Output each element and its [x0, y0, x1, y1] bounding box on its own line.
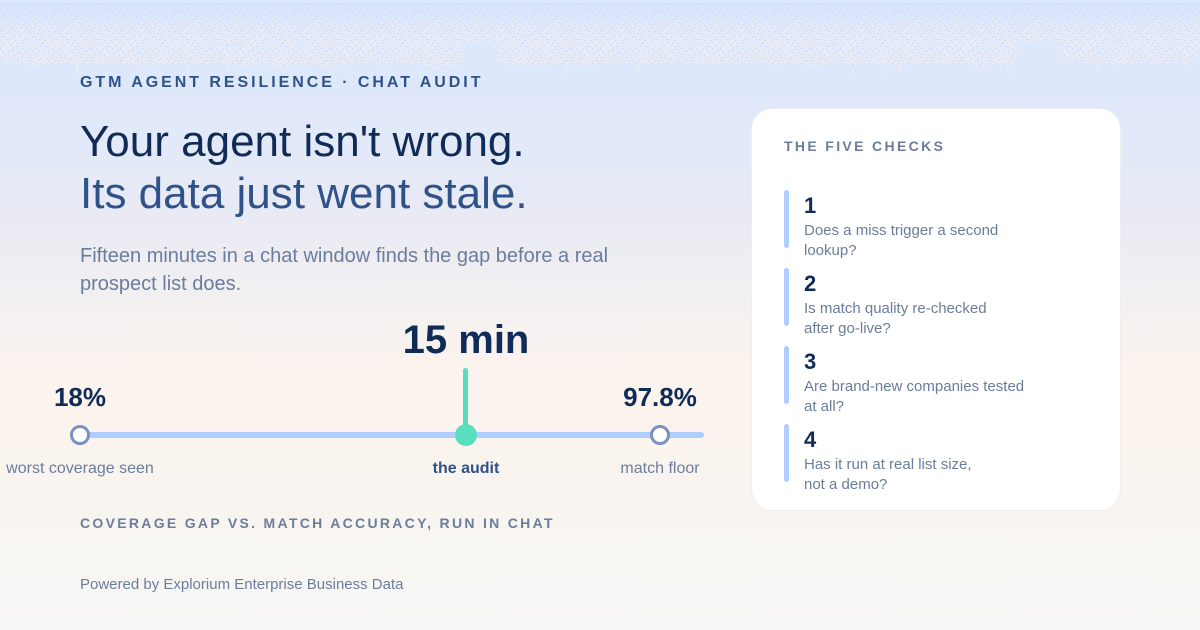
- label: match floor: match floor: [620, 460, 700, 477]
- check 3 text: Are brand-new companies tested: [804, 378, 1024, 395]
- eyebrow heading: GTM AGENT RESILIENCE · CHAT AUDIT: [80, 74, 483, 91]
- value: 97.8%: 97.8%: [623, 382, 697, 412]
- check 1: [784, 190, 998, 259]
- check 3 text: at all?: [804, 398, 844, 415]
- panel heading: THE FIVE CHECKS: [784, 138, 945, 154]
- check 3 number: 3: [804, 349, 816, 374]
- check 4 bar: [784, 424, 789, 482]
- value: 18%: 18%: [54, 382, 106, 412]
- chart caption: COVERAGE GAP VS. MATCH ACCURACY, RUN IN CHAT: [80, 515, 555, 531]
- check 1 text: [804, 222, 998, 259]
- check 2 number: 2: [804, 271, 816, 296]
- check 1 text: lookup?: [804, 242, 857, 259]
- check 1 number: 1: [804, 193, 816, 218]
- check 4 number: 4: [804, 427, 816, 452]
- check 4 text: Has it run at real list size,: [804, 456, 972, 473]
- check 3 bar: [784, 346, 789, 404]
- check 3 text: [804, 378, 1024, 415]
- panel: the five checks: [752, 109, 1120, 510]
- label: the audit: the audit: [433, 460, 499, 477]
- timeline chart: [6, 318, 704, 477]
- subtitle: Fifteen minutes in a chat window finds the gap before a real: [80, 245, 608, 267]
- footer: Powered by Explorium Enterprise Business Data: [80, 576, 403, 593]
- check 4 text: not a demo?: [804, 476, 887, 493]
- check 1 text: Does a miss trigger a second: [804, 222, 998, 239]
- title: [80, 117, 528, 218]
- value: 15 min: 15 min: [403, 318, 529, 362]
- audit marker dot: [455, 424, 477, 446]
- check 2: [784, 268, 987, 337]
- right marker: [650, 425, 670, 445]
- dithered top texture: [0, 3, 1200, 75]
- audit marker stem: [463, 368, 468, 435]
- title: Its data just went stale.: [80, 169, 528, 218]
- timeline track: [80, 432, 704, 438]
- label: worst coverage seen: worst coverage seen: [6, 460, 154, 477]
- check 4: [784, 424, 972, 493]
- check 2 bar: [784, 268, 789, 326]
- subtitle: [80, 245, 608, 295]
- check 2 text: after go-live?: [804, 320, 891, 337]
- left marker: [70, 425, 90, 445]
- check 4 text: [804, 456, 972, 493]
- check 1 bar: [784, 190, 789, 248]
- subtitle: prospect list does.: [80, 273, 241, 295]
- check 3: [784, 346, 1024, 415]
- check 2 text: Is match quality re-checked: [804, 300, 987, 317]
- title: Your agent isn't wrong.: [80, 117, 525, 166]
- check 2 text: [804, 300, 987, 337]
